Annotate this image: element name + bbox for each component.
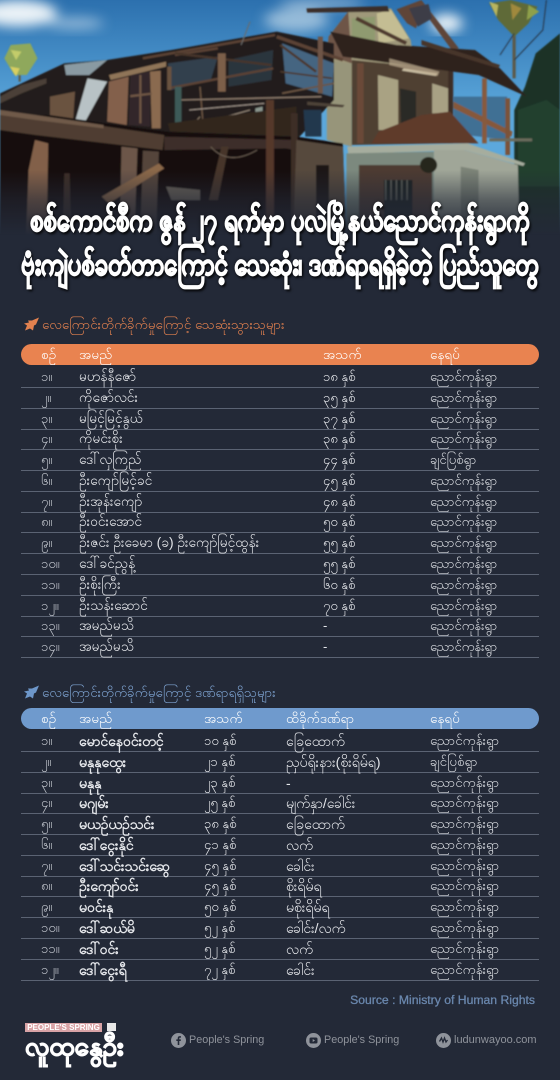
row 12: ခေါင်း <box>286 962 315 978</box>
row 2: ၂။ <box>41 390 51 405</box>
section heading: killed: လေကြောင်းတိုက်ခိုက်မှုကြောင့် သေဆုံးသွားသူများ <box>42 317 285 332</box>
row 7: ၄၈ နှစ် <box>323 494 355 509</box>
table header: injured: နေရပ် <box>430 711 460 726</box>
balcony sky <box>454 97 507 140</box>
row 11: ၆၀ နှစ် <box>323 577 355 592</box>
row 12: ညောင်ကုန်းရွာ <box>430 598 497 613</box>
row 2: ညှပ်ရိုးနား(စိုးရိမ်ရ) <box>286 754 380 770</box>
table header: killed <box>21 344 539 365</box>
row 1 <box>21 367 539 388</box>
row 6: ၄၁ နှစ် <box>204 837 236 852</box>
right roof <box>330 32 527 97</box>
row 6: ၆။ <box>41 473 52 488</box>
row 12: ၇၂ နှစ် <box>204 962 235 977</box>
row 8 <box>21 512 539 533</box>
row 14 <box>21 637 539 658</box>
row 4: ၄။ <box>41 431 52 446</box>
row 7 <box>21 492 539 513</box>
row 5: မယဉ်ယဉ်သင်း <box>79 816 155 832</box>
row 13: အမည်မသိ <box>79 618 134 633</box>
row 7 <box>21 856 539 877</box>
row 5: ညောင်ကုန်းရွာ <box>430 816 499 831</box>
row 12 <box>21 960 539 981</box>
row 7: ညောင်ကုန်းရွာ <box>430 858 499 873</box>
footer: facebook <box>171 1033 264 1048</box>
row 14: အမည်မသိ <box>79 639 134 654</box>
row 2: ၂။ <box>41 754 51 769</box>
row 12: ၁၂။ <box>41 962 59 977</box>
row 5: ၅။ <box>41 452 52 467</box>
row 3: - <box>286 775 291 791</box>
row 3: ညောင်ကုန်းရွာ <box>430 775 499 790</box>
row 10: ၅၅ နှစ် <box>323 556 355 571</box>
row 10: ၅၂ နှစ် <box>204 920 235 935</box>
row 14: ညောင်ကုန်းရွာ <box>430 639 497 654</box>
row 1: ညောင်ကုန်းရွာ <box>430 733 499 748</box>
row 6: ၆။ <box>41 837 52 852</box>
row 11: ညောင်ကုန်းရွာ <box>430 577 497 592</box>
row 4 <box>21 793 539 814</box>
row 4: ၂၅ နှစ် <box>204 795 235 810</box>
row 9: ၉။ <box>41 899 52 914</box>
row 12: ၁၂။ <box>41 598 59 613</box>
row 3: ၃။ <box>41 411 52 426</box>
table: injured <box>21 732 539 982</box>
row 8: ညောင်ကုန်းရွာ <box>430 514 497 529</box>
footer: youtube: People's Spring <box>324 1034 399 1046</box>
footer: youtube <box>306 1033 399 1048</box>
row 12: ညောင်ကုန်းရွာ <box>430 962 499 977</box>
trees right <box>514 33 560 250</box>
row 4: ညောင်ကုန်းရွာ <box>430 795 499 810</box>
logo: People's Spring: လူထုနွေဦး <box>25 1031 124 1061</box>
centre lower wall <box>293 140 346 250</box>
row 11: လက် <box>286 941 313 957</box>
row 11 <box>21 575 539 596</box>
sky gaps <box>282 43 334 97</box>
row 5: ၅။ <box>41 816 52 831</box>
palms <box>512 33 516 78</box>
top beams <box>306 6 389 13</box>
row 9: ၅၀ နှစ် <box>204 899 236 914</box>
row 11: ၁၁။ <box>41 577 60 592</box>
row 3: ၃၇ နှစ် <box>323 411 355 426</box>
row 2 <box>21 388 539 409</box>
row 9: ညောင်ကုန်းရွာ <box>430 535 497 550</box>
row 7: ၇။ <box>41 858 52 873</box>
footer: website: ludunwayoo.com <box>454 1034 537 1046</box>
row 1: ၁။ <box>41 369 52 384</box>
row 12: ဒေါ်ငွေးရီ <box>79 962 127 978</box>
row 5 <box>21 450 539 471</box>
wall patches <box>107 77 129 125</box>
row 11: ဦးစိုးကြီး <box>79 577 121 592</box>
row 7: ဒေါ်သင်းသင်းဆွေ <box>79 858 170 874</box>
source note: Source : Ministry of Human Rights <box>350 993 535 1007</box>
row 2: ညောင်ကုန်းရွာ <box>430 390 497 405</box>
row 2 <box>21 752 539 773</box>
row 3: ၂၃ နှစ် <box>204 775 235 790</box>
row 2: ချင်ပြစ်ရွာ <box>430 754 478 769</box>
row 5: ဒေါ်လှကြည် <box>79 452 141 467</box>
row 3 <box>21 409 539 430</box>
lower floor left <box>0 115 346 250</box>
row 8: ဦးကျော်ဝင်း <box>79 878 139 894</box>
row 7: ၄၅ နှစ် <box>204 858 236 873</box>
title <box>20 199 541 292</box>
row 10 <box>21 554 539 575</box>
row 10: ခေါင်း/လက် <box>286 920 345 936</box>
row 3: ၃။ <box>41 775 52 790</box>
row 9: ဦးဇင်း ဦးခေမာ (ခ) ဦးကျော်မြင့်ထွန်း <box>79 535 259 550</box>
row 8: ညောင်ကုန်းရွာ <box>430 878 499 893</box>
table header: injured: အသက် <box>204 711 243 726</box>
row 7: ဦးအုန်းကျော် <box>79 494 142 509</box>
footer: facebook: People's Spring <box>189 1034 264 1046</box>
row 13: - <box>323 618 327 633</box>
row 10 <box>21 918 539 939</box>
row 6: ညောင်ကုန်းရွာ <box>430 837 499 852</box>
row 8: ၈။ <box>41 878 52 893</box>
table header: injured: အမည် <box>79 711 112 726</box>
logo: People's Spring: PEOPLE'S SPRING <box>27 1023 100 1032</box>
photo: bombed building <box>0 0 560 230</box>
row 14: - <box>323 639 327 654</box>
row 9: ၉။ <box>41 535 52 550</box>
row 5: ၃၈ နှစ် <box>204 816 236 831</box>
row 7: ခေါင်း <box>286 858 315 874</box>
table header: killed: အမည် <box>79 347 112 362</box>
row 1: ညောင်ကုန်းရွာ <box>430 369 497 384</box>
row 12: ၇၀ နှစ် <box>323 598 355 613</box>
title: စစ်ကောင်စီက ဇွန် ၂၇ ရက်မှာ ပုလဲမြို့နယ်ညောင်ကုန်းရွာကို <box>30 204 530 238</box>
row 11: ညောင်ကုန်းရွာ <box>430 941 499 956</box>
right lower storey <box>347 143 525 166</box>
row 9: မဝင်းနု <box>79 899 113 915</box>
table header: killed: အသက် <box>323 347 362 362</box>
row 1: ခြေထောက် <box>286 733 345 749</box>
row 4 <box>21 429 539 450</box>
rafters <box>143 22 343 133</box>
row 8: ဦးဝင်းအောင် <box>79 514 142 529</box>
row 9 <box>21 897 539 918</box>
row 1: ၁၈ နှစ် <box>323 369 355 384</box>
row 6: ၄၅ နှစ် <box>323 473 355 488</box>
row 3: မမြင့်မြင့်နွယ် <box>79 411 143 426</box>
row 3: ညောင်ကုန်းရွာ <box>430 411 497 426</box>
row 3 <box>21 773 539 794</box>
section heading: injured: လေကြောင်းတိုက်ခိုက်မှုကြောင့် ဒဏ်ရာရရှိသူများ <box>42 685 276 700</box>
row 4: ၄။ <box>41 795 52 810</box>
right gable wall <box>327 8 414 87</box>
row 8: စိုးရိမ်ရ <box>286 878 322 894</box>
left roof mass <box>0 32 334 140</box>
row 10: ၁၀။ <box>41 920 60 935</box>
logo: People's Spring <box>25 1023 124 1068</box>
row 7: ညောင်ကုန်းရွာ <box>430 494 497 509</box>
row 4: ညောင်ကုန်းရွာ <box>430 431 497 446</box>
row 2: ကိုဇော်လင်း <box>79 390 138 405</box>
row 9: ညောင်ကုန်းရွာ <box>430 899 499 914</box>
row 8: ၄၅ နှစ် <box>204 878 236 893</box>
row 11: ၁၁။ <box>41 941 60 956</box>
table header: injured <box>21 708 539 729</box>
footer: website <box>436 1033 537 1048</box>
table: killed <box>21 368 539 658</box>
rubble mid <box>168 107 296 140</box>
row 10: ညောင်ကုန်းရွာ <box>430 920 499 935</box>
row 4: ၃၈ နှစ် <box>323 431 355 446</box>
row 13: ၁၃။ <box>41 618 60 633</box>
row 13: ညောင်ကုန်းရွာ <box>430 618 497 633</box>
row 11 <box>21 939 539 960</box>
row 9: မစိုးရိမ်ရ <box>286 899 330 915</box>
row 10: ဒေါ်ဆယ်မိ <box>79 920 135 936</box>
row 2: မနုနုထွေး <box>79 754 126 770</box>
row 13 <box>21 616 539 637</box>
row 6 <box>21 835 539 856</box>
row 2: ၂၁ နှစ် <box>204 754 235 769</box>
row 8 <box>21 876 539 897</box>
row 5: ချင်ပြစ်ရွာ <box>430 452 476 467</box>
row 1 <box>21 731 539 752</box>
row 5 <box>21 814 539 835</box>
row 1: မောင်နေဝင်းတင့် <box>79 733 164 749</box>
row 12 <box>21 596 539 617</box>
row 1: ၁၀ နှစ် <box>204 733 236 748</box>
row 3: မနုနု <box>79 775 101 791</box>
row 11: ၅၂ နှစ် <box>204 941 235 956</box>
row 4: မျက်နှာ/ခေါင်း <box>286 795 355 811</box>
row 11: ဒေါ်ဝင်း <box>79 941 119 957</box>
row 6 <box>21 471 539 492</box>
row 8: ၈။ <box>41 514 52 529</box>
row 5: ၄၄ နှစ် <box>323 452 355 467</box>
table header: killed: နေရပ် <box>430 347 460 362</box>
right upper storey <box>352 60 450 145</box>
row 9 <box>21 533 539 554</box>
row 6: ဒေါ်ငွေးနိုင် <box>79 837 134 853</box>
row 6: လက် <box>286 837 313 853</box>
row 10: ညောင်ကုန်းရွာ <box>430 556 497 571</box>
corrugated sheet <box>76 78 107 121</box>
table header: injured: ထိခိုက်ဒဏ်ရာ <box>286 711 354 726</box>
row 4: မဂျမ်း <box>79 795 109 811</box>
row 1: ၁။ <box>41 733 52 748</box>
row 14: ၁၄။ <box>41 639 60 654</box>
row 7: ၇။ <box>41 494 52 509</box>
row 2: ၃၅ နှစ် <box>323 390 355 405</box>
row 12: ဦးသန်းဆောင် <box>79 598 148 613</box>
row 1: မဟန်နီဇော် <box>79 369 136 384</box>
row 9: ၅၅ နှစ် <box>323 535 355 550</box>
table header: injured: စဉ် <box>41 711 56 726</box>
row 4: ကိုမင်းစိုး <box>79 431 123 446</box>
row 10: ဒေါ်ခင်ညွန့် <box>79 556 135 571</box>
row 8: ၅၀ နှစ် <box>323 514 355 529</box>
table header: killed: စဉ် <box>41 347 56 362</box>
row 10: ၁၀။ <box>41 556 60 571</box>
row 6: ညောင်ကုန်းရွာ <box>430 473 497 488</box>
wall column <box>327 60 352 147</box>
row 6: ဦးကျော်မြင့်ခင် <box>79 473 152 488</box>
row 5: ခြေထောက် <box>286 816 345 832</box>
title: ဗုံးကျဲပစ်ခတ်တာကြောင့် သေဆုံး၊ ဒဏ်ရာရရှိခဲ့တဲ့ ပြည်သူတွေ <box>21 248 539 282</box>
